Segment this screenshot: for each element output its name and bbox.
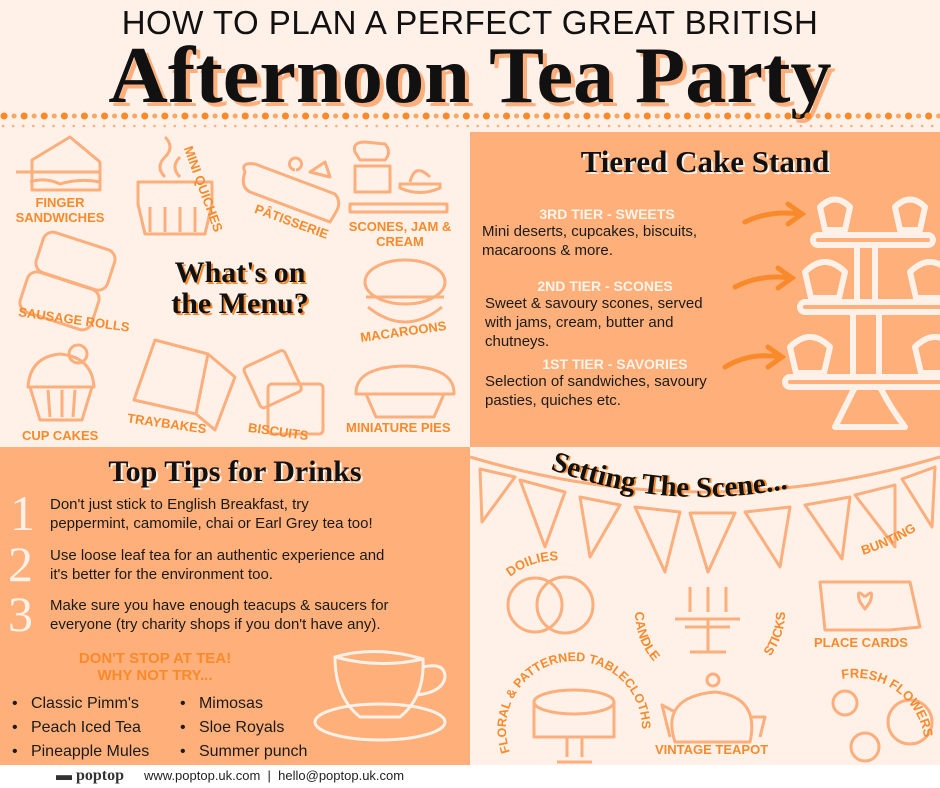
icon: pie bbox=[356, 366, 454, 417]
bunting bbox=[470, 457, 940, 572]
label: scones bbox=[349, 219, 451, 249]
icon: scones bbox=[350, 142, 447, 212]
label: candle sticks: STICKS bbox=[764, 612, 785, 656]
label: vintage teapot: VINTAGE TEAPOT bbox=[655, 742, 768, 757]
label: traybakes: TRAYBAKES bbox=[126, 411, 207, 436]
footer bbox=[0, 765, 940, 788]
heading: what's on the menu: the Menu? bbox=[171, 287, 309, 320]
heading: what's on the menu: What's on bbox=[175, 256, 305, 289]
label: tablecloths: FLORAL & PATTERNED TABLECLOTHS bbox=[497, 652, 651, 754]
label: mini quiches: MINI QUICHES bbox=[181, 144, 226, 234]
panel: top tips for drinks bbox=[0, 447, 470, 765]
tip 2: 2 bbox=[8, 536, 33, 592]
label: bunting: BUNTING bbox=[861, 524, 916, 555]
label: doilies: DOILIES bbox=[506, 551, 558, 576]
icon: sausage rolls bbox=[17, 230, 118, 332]
heading: setting the scene: Setting The Scene... bbox=[554, 454, 788, 498]
label: fresh flowers: FRESH FLOWERS bbox=[842, 668, 933, 737]
subheading: WHY NOT TRY... bbox=[97, 667, 212, 684]
list left: • Pineapple Mules bbox=[12, 743, 149, 760]
panel: tiered cake stand bbox=[470, 132, 940, 447]
tier 2 text: 2ND TIER - SCONES bbox=[537, 278, 673, 294]
icon: cupcake bbox=[28, 345, 94, 420]
label: patisserie: PÂTISSERIE bbox=[253, 201, 331, 242]
list right: • Sloe Royals bbox=[180, 719, 284, 736]
list left: • Peach Iced Tea bbox=[12, 719, 141, 736]
panel: setting the scene bbox=[470, 453, 940, 764]
heading: Top Tips for Drinks bbox=[108, 455, 362, 488]
label: scones: CREAM bbox=[376, 234, 424, 249]
list left bbox=[12, 695, 149, 760]
label: macaroons: MACAROONS bbox=[359, 318, 447, 345]
contact: www.poptop.uk.com | hello@poptop.uk.com bbox=[144, 768, 404, 783]
label: candle sticks: CANDLE bbox=[635, 612, 660, 662]
tip 1 bbox=[10, 485, 373, 541]
subheading bbox=[79, 650, 231, 684]
label: finger sandwiches bbox=[16, 195, 104, 225]
label: cup cakes: CUP CAKES bbox=[22, 428, 98, 443]
tier 3 text: Mini deserts, cupcakes, biscuits, macaroons & more. bbox=[482, 223, 697, 259]
subheading: DON'T STOP AT TEA! bbox=[79, 650, 231, 667]
icon: candlesticks bbox=[675, 587, 740, 652]
tier 1 text: Selection of sandwiches, savoury pasties, quiches etc. bbox=[485, 373, 707, 409]
tier 1 text: 1ST TIER - SAVORIES bbox=[542, 356, 688, 372]
tip 2 bbox=[8, 536, 384, 592]
label: place cards: PLACE CARDS bbox=[814, 635, 908, 650]
list right bbox=[180, 695, 307, 760]
icon: cake stand bbox=[782, 196, 940, 430]
heading: Tiered Cake Stand bbox=[581, 144, 829, 179]
tier 1 text bbox=[485, 356, 707, 409]
icon: teacup bbox=[314, 650, 446, 742]
label: finger sandwiches: FINGER bbox=[35, 195, 85, 210]
icon: flowers bbox=[833, 691, 932, 761]
heading: setting the scene: Setting The Scene... bbox=[552, 453, 786, 498]
tip 3: 3 bbox=[8, 586, 33, 642]
panel: menu bbox=[16, 136, 456, 443]
label: biscuits: BISCUITS bbox=[247, 420, 309, 443]
decorative dots bbox=[0, 112, 940, 128]
list left: • Classic Pimm's bbox=[12, 695, 139, 712]
label: miniature pies: MINIATURE PIES bbox=[346, 420, 450, 435]
tier 3 text: 3RD TIER - SWEETS bbox=[539, 206, 675, 222]
tip 1: peppermint, camomile, chai or Earl Grey tea too! bbox=[50, 515, 373, 532]
icon: macaron bbox=[365, 260, 445, 322]
tier 3 text bbox=[482, 206, 697, 259]
icon: quiche bbox=[138, 137, 212, 234]
label: sausage rolls: SAUSAGE ROLLS bbox=[18, 304, 130, 335]
icon: teapot bbox=[662, 674, 765, 742]
tip 2: it's better for the environment too. bbox=[50, 566, 273, 583]
icon: place card bbox=[820, 582, 920, 630]
list right: • Summer punch bbox=[180, 743, 307, 760]
logo: ▬ poptop bbox=[56, 767, 124, 784]
tip 1: Don't just stick to English Breakfast, try bbox=[50, 496, 309, 513]
label: scones: SCONES, JAM & bbox=[349, 219, 451, 234]
tip 3: everyone (try charity shops if you don't have any). bbox=[50, 616, 381, 633]
list right: • Mimosas bbox=[180, 695, 263, 712]
icon: traybakes bbox=[134, 340, 235, 430]
tip 3 bbox=[8, 586, 389, 642]
title: main: Afternoon Tea Party bbox=[108, 32, 832, 120]
icon: sandwich bbox=[16, 137, 100, 190]
icon: biscuits bbox=[243, 349, 323, 434]
label: candle sticks bbox=[635, 612, 785, 662]
tip 2: Use loose leaf tea for an authentic experience and bbox=[50, 547, 384, 564]
icon: patisserie bbox=[243, 158, 339, 222]
tip 3: Make sure you have enough teacups & saucers for bbox=[50, 597, 389, 614]
tip 1: 1 bbox=[10, 485, 35, 541]
heading: what's on the menu bbox=[171, 256, 309, 320]
title: subtitle: HOW TO PLAN A PERFECT GREAT BRITISH bbox=[122, 4, 818, 41]
label: finger sandwiches: SANDWICHES bbox=[16, 210, 104, 225]
arrows bbox=[722, 202, 806, 370]
icon: doilies bbox=[508, 577, 593, 633]
tier 2 text: Sweet & savoury scones, served with jams, cream, butter and chutneys. bbox=[485, 295, 703, 350]
icon: tablecloth bbox=[534, 690, 614, 762]
